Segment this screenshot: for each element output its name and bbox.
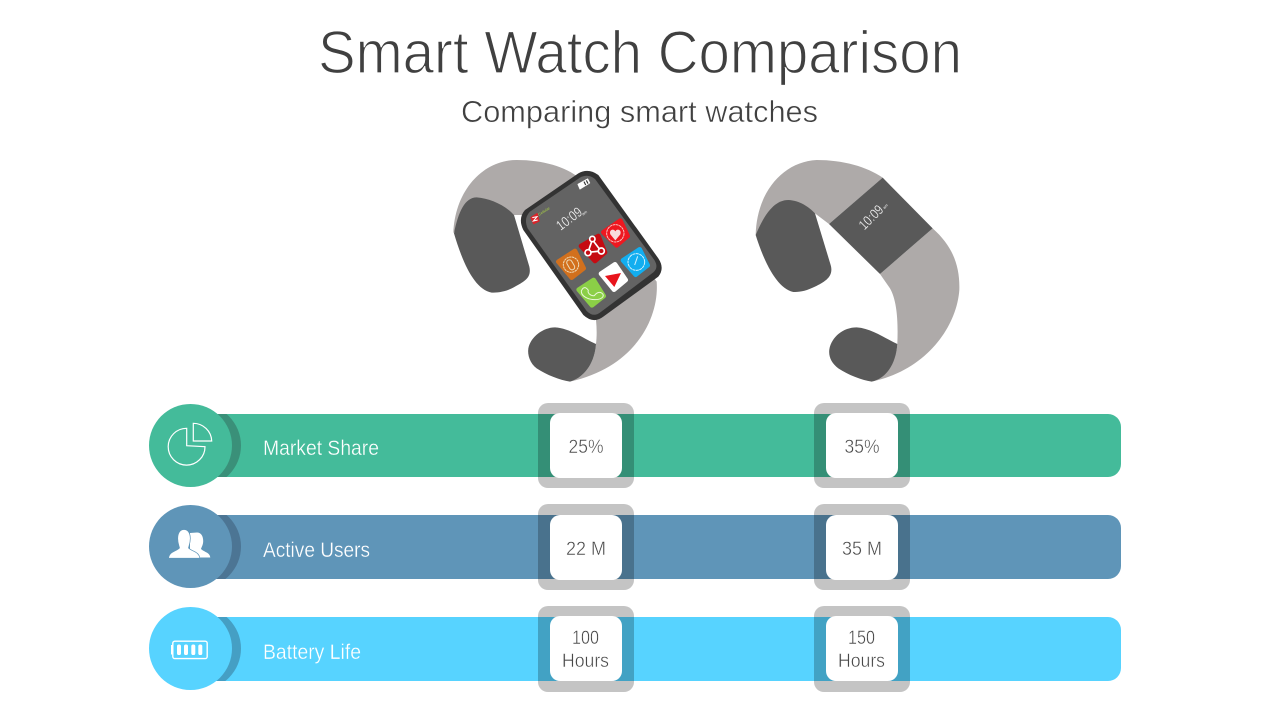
watch face [521, 171, 662, 320]
watch strap upper [453, 160, 580, 233]
value card: 35 M: 35 M [842, 539, 882, 560]
app: share [581, 236, 605, 261]
icon: battery [149, 607, 232, 690]
value card: 35 M [814, 504, 910, 590]
clock text: 10:09 [855, 201, 887, 233]
strap inner bottom [528, 327, 596, 382]
front person [169, 530, 200, 558]
row: Active Users [149, 504, 1121, 590]
band display [829, 178, 933, 274]
band strap lower [872, 228, 959, 382]
value card: 25%: 25% [568, 437, 604, 458]
app: phone [579, 280, 604, 305]
watch case [521, 171, 662, 320]
watch straps [453, 160, 657, 382]
value card: 150 Hours: Hours [838, 651, 885, 672]
subtitle: Comparing smart watches [461, 94, 818, 129]
bar [200, 515, 1121, 579]
band strap upper [756, 160, 883, 235]
value card: 35%: 35% [844, 437, 880, 458]
am label: am [882, 202, 889, 210]
strap inner bottom [829, 327, 897, 382]
icon: users [149, 505, 232, 588]
label: Market Share [263, 437, 379, 460]
title: Smart Watch Comparison [318, 19, 962, 86]
row: Market Share [149, 403, 1121, 488]
value card: 22 M [538, 504, 634, 590]
value card: 100 Hours [538, 606, 634, 692]
value card: 150 Hours: 150 [848, 628, 875, 649]
icon shadow [218, 414, 241, 477]
value card: 100 Hours: Hours [562, 651, 609, 672]
app: gauge [623, 249, 648, 275]
illustration: smart band [756, 160, 959, 382]
icon: pie chart [149, 404, 232, 487]
icon shadow [216, 617, 241, 681]
value card: 150 Hours [814, 606, 910, 692]
row: Battery Life [149, 606, 1121, 692]
status label: Cellular [537, 206, 551, 217]
bar [200, 617, 1121, 681]
value card: 22 M: 22 M [566, 539, 606, 560]
strap inner left [756, 200, 831, 292]
label: Battery Life [263, 641, 361, 664]
bar [200, 414, 1121, 477]
app: orange [558, 251, 584, 278]
app: play [601, 264, 626, 290]
watch strap lower [570, 260, 657, 382]
label: Active Users [263, 539, 370, 562]
battery status [578, 179, 590, 189]
strap inner left [454, 197, 530, 293]
icon shadow [216, 515, 241, 579]
app: heart [603, 221, 628, 245]
value card: 35% [814, 403, 910, 488]
back person [190, 532, 210, 558]
illustration: smart watch with app screen [453, 160, 662, 382]
app badge [531, 214, 539, 224]
value card: 25% [538, 403, 634, 488]
value card: 100 Hours: 100 [572, 628, 599, 649]
clock text: 10:09 [553, 203, 585, 233]
watch screen [526, 176, 656, 315]
am label: am [581, 209, 589, 216]
